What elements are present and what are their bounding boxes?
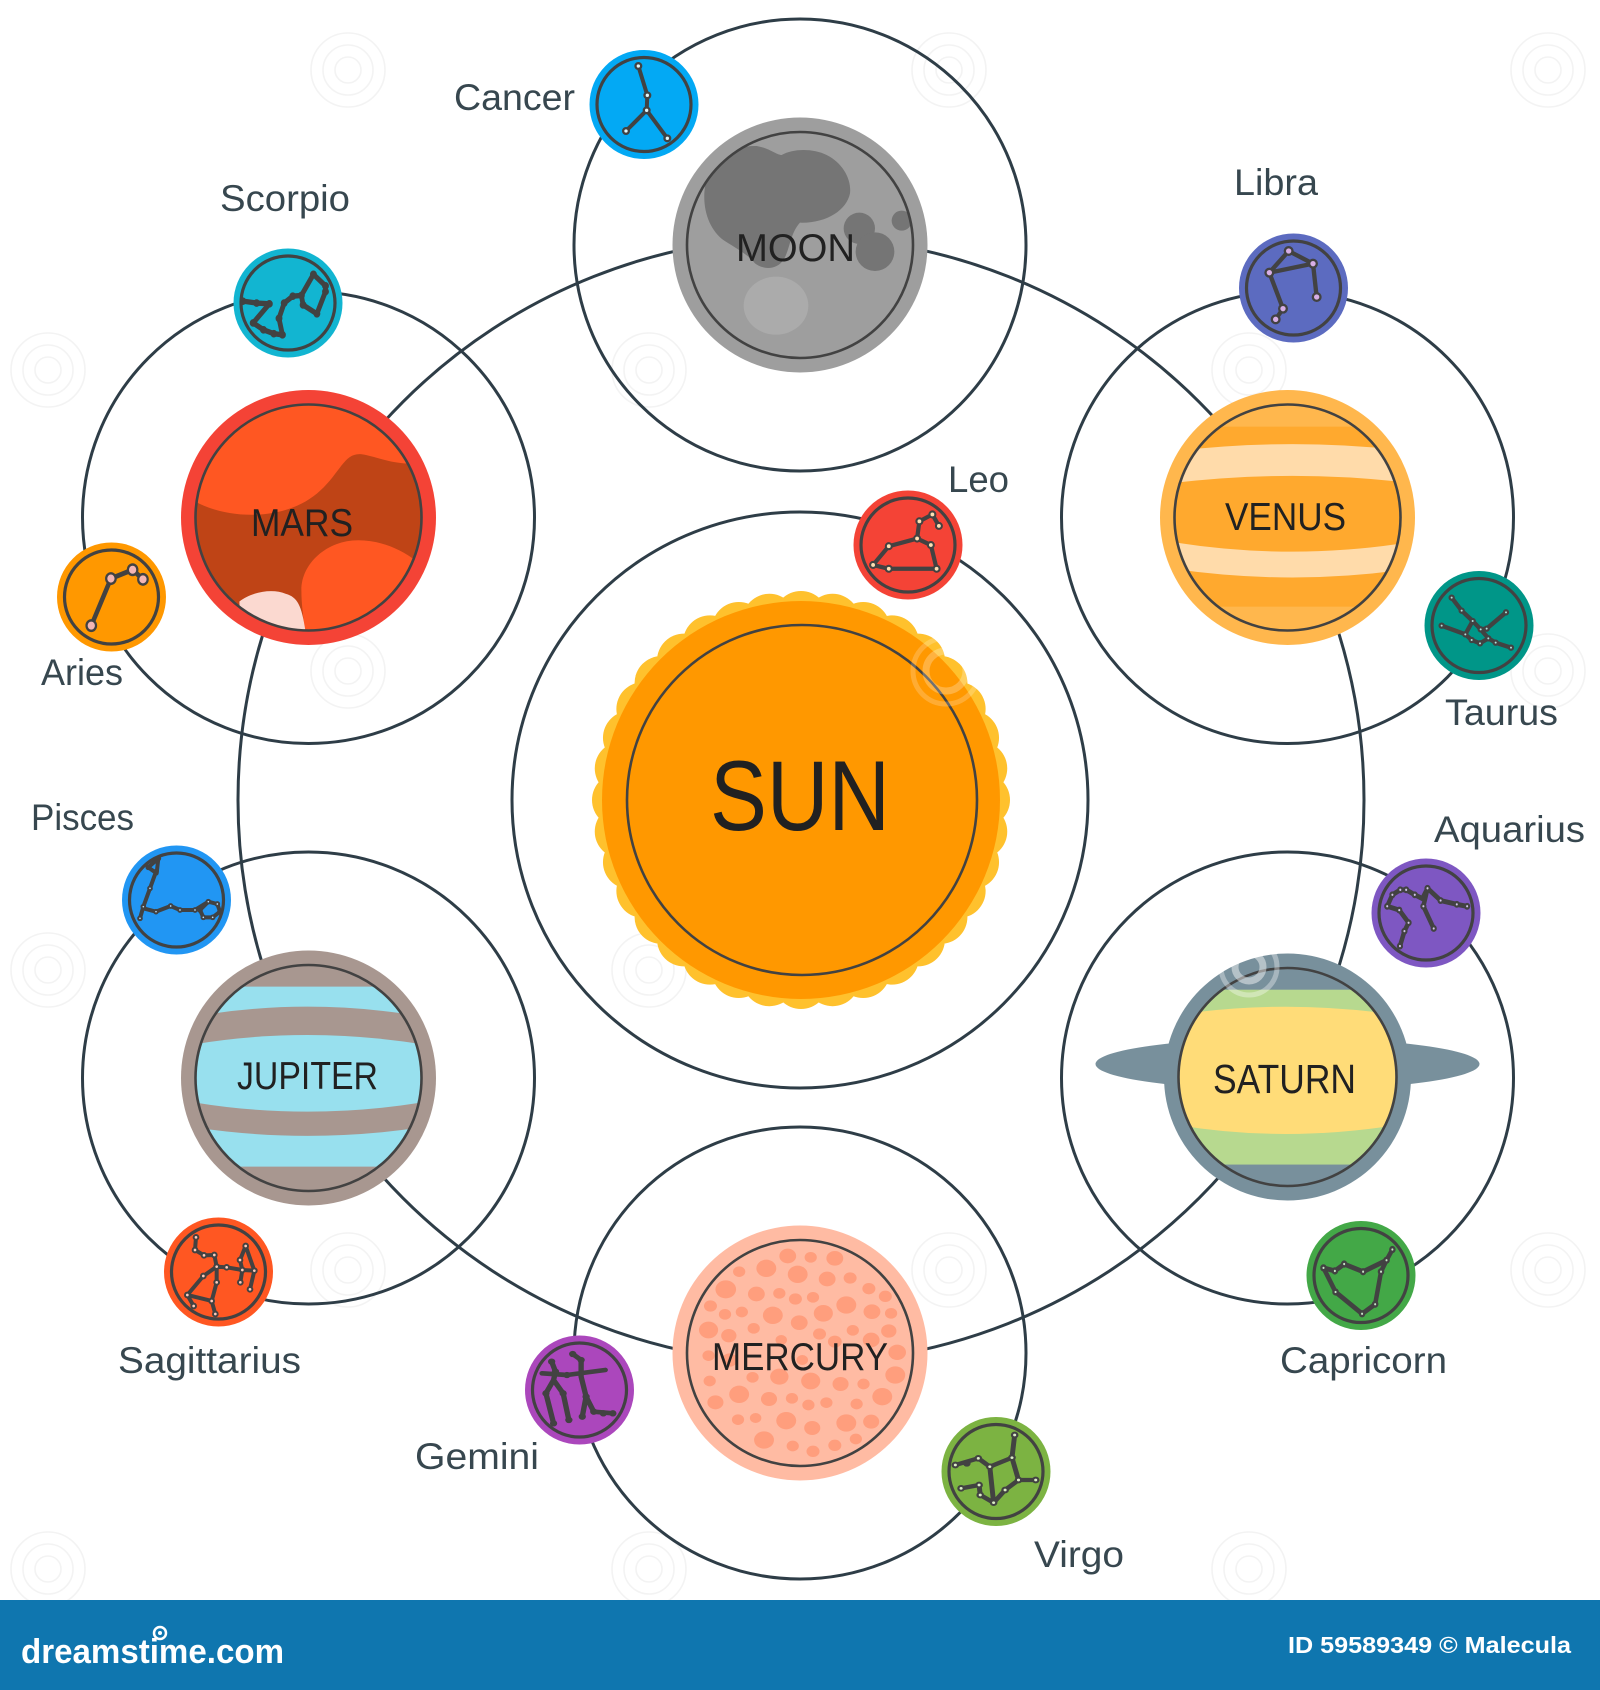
planet: Sun: SUN <box>710 740 890 851</box>
zodiac badge: Aries <box>57 542 166 652</box>
planet: Jupiter <box>181 950 436 1206</box>
planet: Mercury: MERCURY <box>712 1336 888 1379</box>
planet: Sun <box>602 601 1000 999</box>
planet: Saturn: SATURN <box>1213 1056 1356 1102</box>
zodiac badge: Aquarius <box>1372 858 1480 968</box>
planet: Venus: VENUS <box>1225 496 1346 539</box>
label: Libra: Libra <box>1234 162 1318 203</box>
footer band <box>0 1600 1600 1690</box>
label: Gemini: Gemini <box>415 1436 539 1477</box>
label: Pisces: Pisces <box>31 797 134 838</box>
planet: Moon <box>672 118 928 372</box>
planet: Mars <box>181 390 436 647</box>
zodiac badge: Sagittarius <box>164 1218 273 1326</box>
zodiac badge: Libra <box>1239 234 1348 342</box>
label: Scorpio: Scorpio <box>220 178 350 219</box>
label: Sagittarius: Sagittarius <box>118 1340 301 1381</box>
label: Leo: Leo <box>948 459 1009 500</box>
planet: Mercury <box>672 1226 928 1480</box>
planet: Moon: MOON <box>736 227 855 270</box>
footer credit: ID 59589349 © Malecula <box>1288 1632 1571 1658</box>
zodiac badge: Scorpio <box>234 248 342 358</box>
label: Aries: Aries <box>41 652 123 693</box>
zodiac badge: Virgo <box>942 1417 1050 1526</box>
zodiac badge: Taurus <box>1424 571 1534 680</box>
label: Aquarius: Aquarius <box>1434 809 1585 850</box>
footer logo: dreamstime.com <box>21 1633 284 1671</box>
zodiac badge: Capricorn <box>1306 1221 1416 1330</box>
label: Capricorn: Capricorn <box>1280 1340 1447 1381</box>
zodiac badge: Leo <box>854 490 962 600</box>
planet: Mars: MARS <box>251 502 353 545</box>
label: Virgo: Virgo <box>1034 1534 1124 1575</box>
zodiac badge: Pisces <box>122 846 231 954</box>
planet: Saturn <box>1096 939 1480 1200</box>
planet: Jupiter: JUPITER <box>237 1055 378 1098</box>
zodiac badge: Gemini <box>525 1336 634 1444</box>
label: Taurus: Taurus <box>1445 692 1558 733</box>
planet: Venus <box>1160 390 1417 645</box>
label: Cancer: Cancer <box>454 77 575 118</box>
zodiac badge: Cancer <box>590 50 698 159</box>
